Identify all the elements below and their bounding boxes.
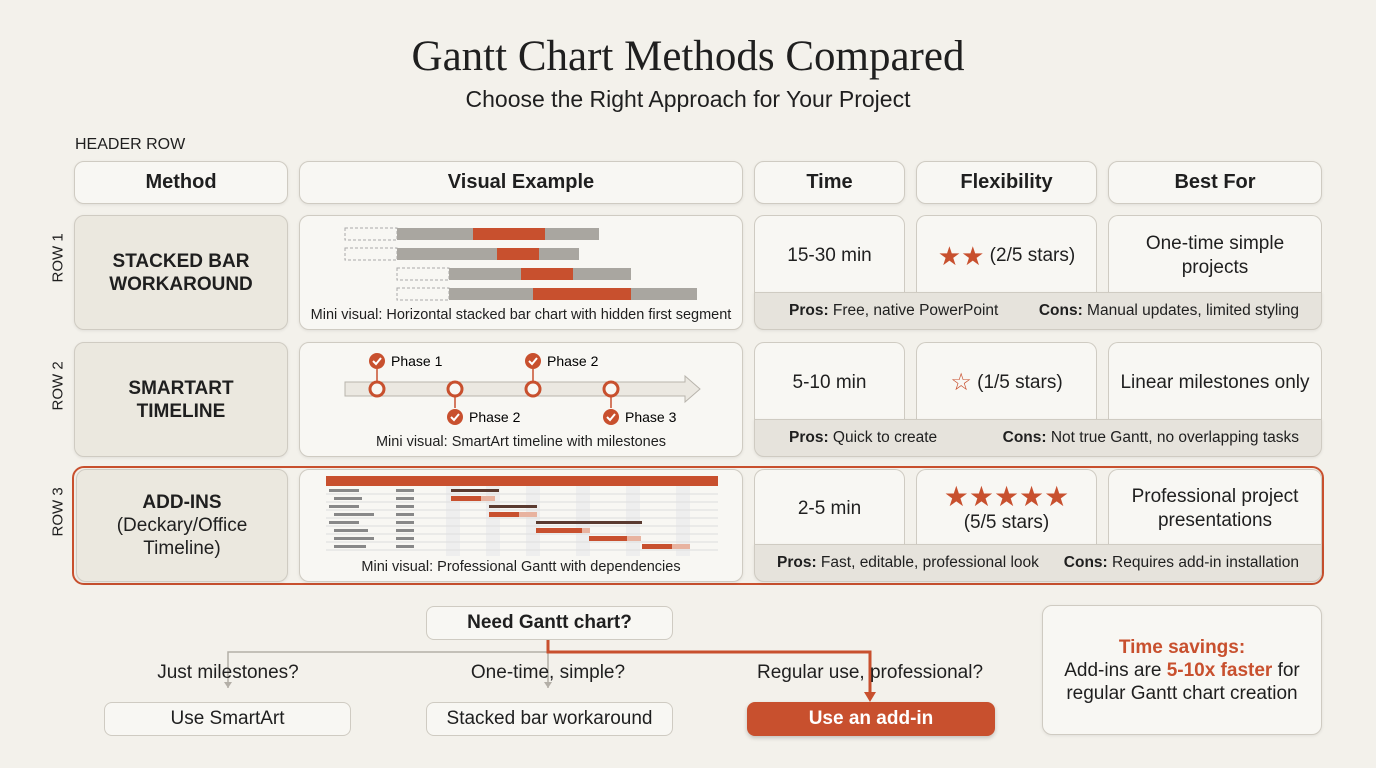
row 3 method: [76, 469, 288, 582]
row 3 visual: professional gantt: [299, 469, 743, 582]
question: regular: Regular use, professional?: [757, 662, 983, 683]
decision: need gantt: [426, 606, 673, 640]
flexibility: [916, 469, 1097, 547]
time: [754, 469, 905, 547]
callout: time savings: Add-ins are 5-10x faster for: [1064, 660, 1300, 680]
pros/cons: Pros: Free, native PowerPoint: [789, 302, 998, 319]
outcome: stacked bar: Stacked bar workaround: [447, 708, 652, 729]
row 1 visual: stacked bar: [299, 215, 743, 330]
time: 5-10 min: [793, 372, 866, 392]
header: time: Time: [806, 171, 853, 193]
flexibility: ☆: [950, 368, 972, 396]
flexibility: (1/5 stars): [977, 372, 1063, 392]
pros/cons: [754, 544, 1322, 582]
row 3 method: Timeline): [143, 538, 221, 559]
header row label: HEADER ROW: [75, 136, 185, 153]
best for: One-time simple: [1146, 232, 1284, 254]
time: 2-5 min: [798, 498, 861, 518]
row 1 method: WORKAROUND: [109, 274, 253, 294]
header: method: [74, 161, 288, 204]
best for: projects: [1182, 256, 1248, 278]
header: method: Method: [145, 171, 217, 193]
row 3 method: ADD-INS: [142, 492, 222, 513]
header: best for: [1108, 161, 1322, 204]
row 2 method: TIMELINE: [137, 400, 225, 422]
callout: time savings: Time savings:: [1119, 636, 1245, 658]
row 2 visual: timeline: Phase 1: [391, 353, 443, 369]
header: time: [754, 161, 905, 204]
caption: Mini visual: SmartArt timeline with milestones: [376, 434, 666, 450]
text: ROW 1: [50, 233, 66, 282]
outcome: add-in: Use an add-in: [809, 708, 933, 729]
caption: Mini visual: Horizontal stacked bar chart with hidden first segment: [311, 307, 731, 323]
title: Gantt Chart Methods Compared: [412, 33, 964, 80]
flowchart: [104, 606, 997, 740]
row 2 visual: timeline: Phase 3: [625, 409, 677, 425]
pros/cons: Cons: Not true Gantt, no overlapping tasks: [1003, 429, 1299, 446]
row 3 highlight outline: [72, 466, 1324, 585]
outcome: smartart: Use SmartArt: [170, 708, 285, 729]
pros/cons: Pros: Quick to create: [789, 429, 937, 446]
flexibility: (5/5 stars): [964, 512, 1049, 532]
header: visual example: Visual Example: [448, 171, 594, 193]
row 2 method: [74, 342, 288, 457]
pros/cons: Cons: Requires add-in installation: [1064, 554, 1299, 571]
best for: [1108, 342, 1322, 422]
flexibility: [916, 215, 1097, 295]
row 2 visual: timeline: Phase 2: [547, 353, 599, 369]
pros/cons: [754, 292, 1322, 330]
pros/cons: Pros: Fast, editable, professional look: [777, 554, 1039, 571]
pros/cons: [754, 419, 1322, 457]
outcome: stacked bar: [426, 702, 673, 736]
callout: time savings: regular Gantt chart creation: [1066, 682, 1298, 704]
time: [754, 215, 905, 295]
question: milestones: Just milestones?: [157, 662, 299, 683]
row 1 method: [74, 215, 288, 330]
row 3 method: (Deckary/Office: [117, 515, 247, 536]
flexibility: (2/5 stars): [990, 244, 1075, 266]
best for: [1108, 215, 1322, 295]
subtitle: Choose the Right Approach for Your Project: [466, 86, 910, 112]
row 1 method: STACKED BAR: [113, 250, 249, 272]
header: visual example: [299, 161, 743, 204]
row 2 visual: timeline: [299, 342, 743, 457]
row 3 metrics: [754, 469, 1322, 583]
text: ROW 2: [50, 361, 66, 410]
caption: Mini visual: Professional Gantt with dependencies: [361, 559, 681, 575]
best for: Linear milestones only: [1120, 372, 1310, 392]
header: flexibility: [916, 161, 1097, 204]
outcome: add-in: [747, 702, 995, 736]
best for: Professional project: [1132, 486, 1298, 506]
text: ROW 3: [50, 487, 66, 536]
decision: need gantt: Need Gantt chart?: [467, 612, 632, 633]
row 2 visual: timeline: Phase 2: [469, 409, 521, 425]
row 1 metrics: [754, 215, 1322, 331]
row 2 method: SMARTART: [128, 378, 234, 398]
best for: presentations: [1158, 510, 1272, 530]
pros/cons: Cons: Manual updates, limited styling: [1039, 302, 1299, 319]
header: best for: Best For: [1174, 171, 1256, 193]
time: [754, 342, 905, 422]
row 2 metrics: [754, 342, 1322, 458]
time: 15-30 min: [787, 244, 872, 266]
best for: [1108, 469, 1322, 547]
header: flexibility: Flexibility: [960, 171, 1053, 193]
outcome: smartart: [104, 702, 351, 736]
header row: [74, 161, 1322, 205]
flexibility: ★★: [938, 240, 984, 270]
question: one-time: One-time, simple?: [471, 662, 625, 683]
callout: time savings: [1042, 605, 1322, 735]
flexibility: [916, 342, 1097, 422]
flexibility: ★★★★★: [944, 480, 1069, 512]
